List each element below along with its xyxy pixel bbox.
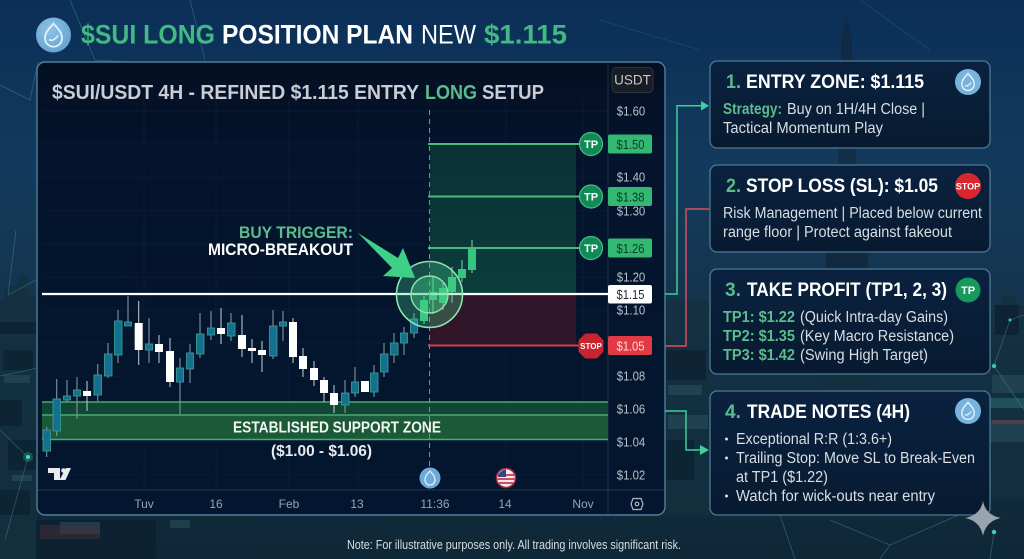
TP badge and price: $1.26: $1.26 [616, 241, 644, 256]
entry price tag: $1.15 [616, 287, 644, 302]
icon: TP: TP [961, 285, 975, 297]
stop badge and price: $1.05 [616, 338, 644, 354]
price axis labels: $1.10 [617, 302, 645, 318]
connector: entry zone [665, 101, 709, 294]
stop badge and price [579, 334, 652, 358]
icon: stop: STOP [956, 182, 980, 192]
chart heading: SETUP [482, 81, 544, 104]
stop badge and price: STOP [580, 342, 602, 351]
price axis labels: $1.60 [617, 104, 645, 118]
icon: US flag marker [496, 468, 516, 488]
trade notes list: Watch for wick-outs near entry [736, 488, 935, 505]
TP badge and price: $1.38 [580, 185, 652, 208]
trade zones [430, 144, 576, 345]
icon: sparkle [965, 501, 1001, 536]
stop loss text: range floor | Protect against fakeout [723, 224, 953, 241]
USDT badge [612, 68, 653, 92]
icon: stop [955, 173, 981, 199]
take profit levels: TP3: $1.42 [723, 347, 795, 364]
entry price tag [608, 285, 652, 304]
buy trigger label: BUY TRIGGER: [239, 224, 353, 242]
title: POSITION PLAN [222, 20, 413, 50]
title: $1.115 [484, 20, 567, 50]
chart heading: $SUI/USDT 4H - REFINED $1.115 ENTRY [52, 81, 419, 104]
TP badge and price: $1.50: $1.50 [616, 137, 644, 152]
price axis labels: $1.04 [617, 434, 645, 450]
trade notes list [725, 431, 975, 505]
entry time marker [428, 110, 430, 468]
time axis labels: 13 [350, 497, 364, 511]
TP badge and price: $1.50 [580, 132, 652, 156]
price axis labels: $1.40 [617, 170, 645, 184]
stop loss heading: 2. [726, 176, 741, 197]
support zone label: ($1.00 - $1.06) [271, 443, 372, 460]
support zone label: ESTABLISHED SUPPORT ZONE [233, 420, 441, 436]
time axis labels: 14 [498, 497, 512, 511]
entry zone text [723, 101, 925, 137]
take profit levels: (Swing High Target) [800, 347, 928, 364]
panel: chart [37, 62, 665, 515]
candlesticks [43, 240, 476, 457]
arrow: buy trigger [358, 233, 415, 278]
icon: SUI [955, 69, 981, 95]
entry zone heading: 1. [726, 72, 741, 93]
icon: settings [631, 498, 643, 510]
entry zone text: Strategy: [723, 101, 782, 118]
price axis labels: $1.06 [617, 402, 645, 416]
time axis labels: 11:36 [420, 497, 450, 511]
TP badge and price: $1.26 [580, 236, 652, 260]
entry zone text: Buy on 1H/4H Close | [787, 101, 925, 118]
icon: SUI logo [36, 18, 71, 52]
trade notes heading: TRADE NOTES (4H) [747, 402, 910, 423]
TP badge and price: $1.38: TP [584, 192, 598, 204]
icon: SUI marker [420, 468, 440, 488]
entry zone heading: ENTRY ZONE: $1.115 [746, 72, 924, 93]
entry price line [42, 293, 608, 295]
TP badge and price: $1.26: TP [584, 243, 598, 255]
price axis labels: $1.20 [617, 270, 645, 284]
trade notes list: Trailing Stop: Move SL to Break-Even [736, 450, 975, 467]
trade notes list: at TP1 ($1.22) [736, 469, 828, 486]
trade notes list: Exceptional R:R (1:3.6+) [736, 431, 892, 448]
take profit heading: TAKE PROFIT (TP1, 2, 3) [747, 280, 947, 301]
panel: stop loss [710, 165, 990, 252]
time axis labels: Feb [279, 497, 300, 511]
entry zone text: Tactical Momentum Play [723, 120, 883, 137]
take profit levels: (Key Macro Resistance) [800, 328, 954, 345]
icon: TradingView logo [48, 468, 71, 480]
take profit and stop lines [428, 144, 580, 346]
price axis labels: $1.30 [617, 204, 645, 218]
chart heading: LONG [425, 81, 477, 104]
stop loss text: Risk Management | Placed below current [723, 205, 983, 222]
icon: TP [956, 278, 980, 302]
time axis labels: 16 [209, 497, 223, 511]
take profit levels: TP2: $1.35 [723, 328, 795, 345]
title: NEW [421, 20, 476, 50]
connector: stop loss [665, 209, 709, 346]
TP badge and price: $1.50: TP [584, 139, 598, 151]
TP badge and price: $1.38: $1.38 [616, 190, 644, 204]
support zone label [233, 420, 441, 460]
panel: trade notes [710, 391, 990, 515]
take profit heading: 3. [725, 280, 741, 301]
price axis labels [617, 104, 645, 482]
trade notes heading: 4. [725, 402, 741, 423]
footnote: Note: For illustrative purposes only. All trading involves significant risk. [347, 538, 681, 552]
stop loss heading: STOP LOSS (SL): $1.05 [746, 176, 938, 197]
buy trigger label [208, 224, 353, 259]
take profit levels [723, 309, 954, 364]
chart grid [42, 100, 608, 490]
buy trigger highlight [396, 262, 462, 328]
USDT badge: USDT [614, 72, 651, 88]
time axis labels [134, 497, 594, 511]
price axis labels: $1.02 [617, 468, 645, 482]
price axis labels: $1.08 [617, 368, 645, 384]
icon: SUI [955, 398, 981, 424]
support zone [42, 402, 608, 440]
time axis labels: Tuv [134, 497, 154, 511]
chart axis dividers [38, 63, 664, 514]
buy trigger label: MICRO-BREAKOUT [208, 241, 353, 259]
stop loss text [723, 205, 983, 241]
panel: take profit [710, 269, 990, 374]
title: $SUI LONG [81, 20, 215, 50]
connector: trade notes [665, 411, 709, 455]
time axis labels: Nov [572, 497, 594, 511]
panel: entry zone [710, 61, 990, 148]
take profit levels: TP1: $1.22 [723, 309, 795, 326]
take profit levels: (Quick Intra-day Gains) [800, 309, 948, 326]
title [81, 20, 567, 50]
